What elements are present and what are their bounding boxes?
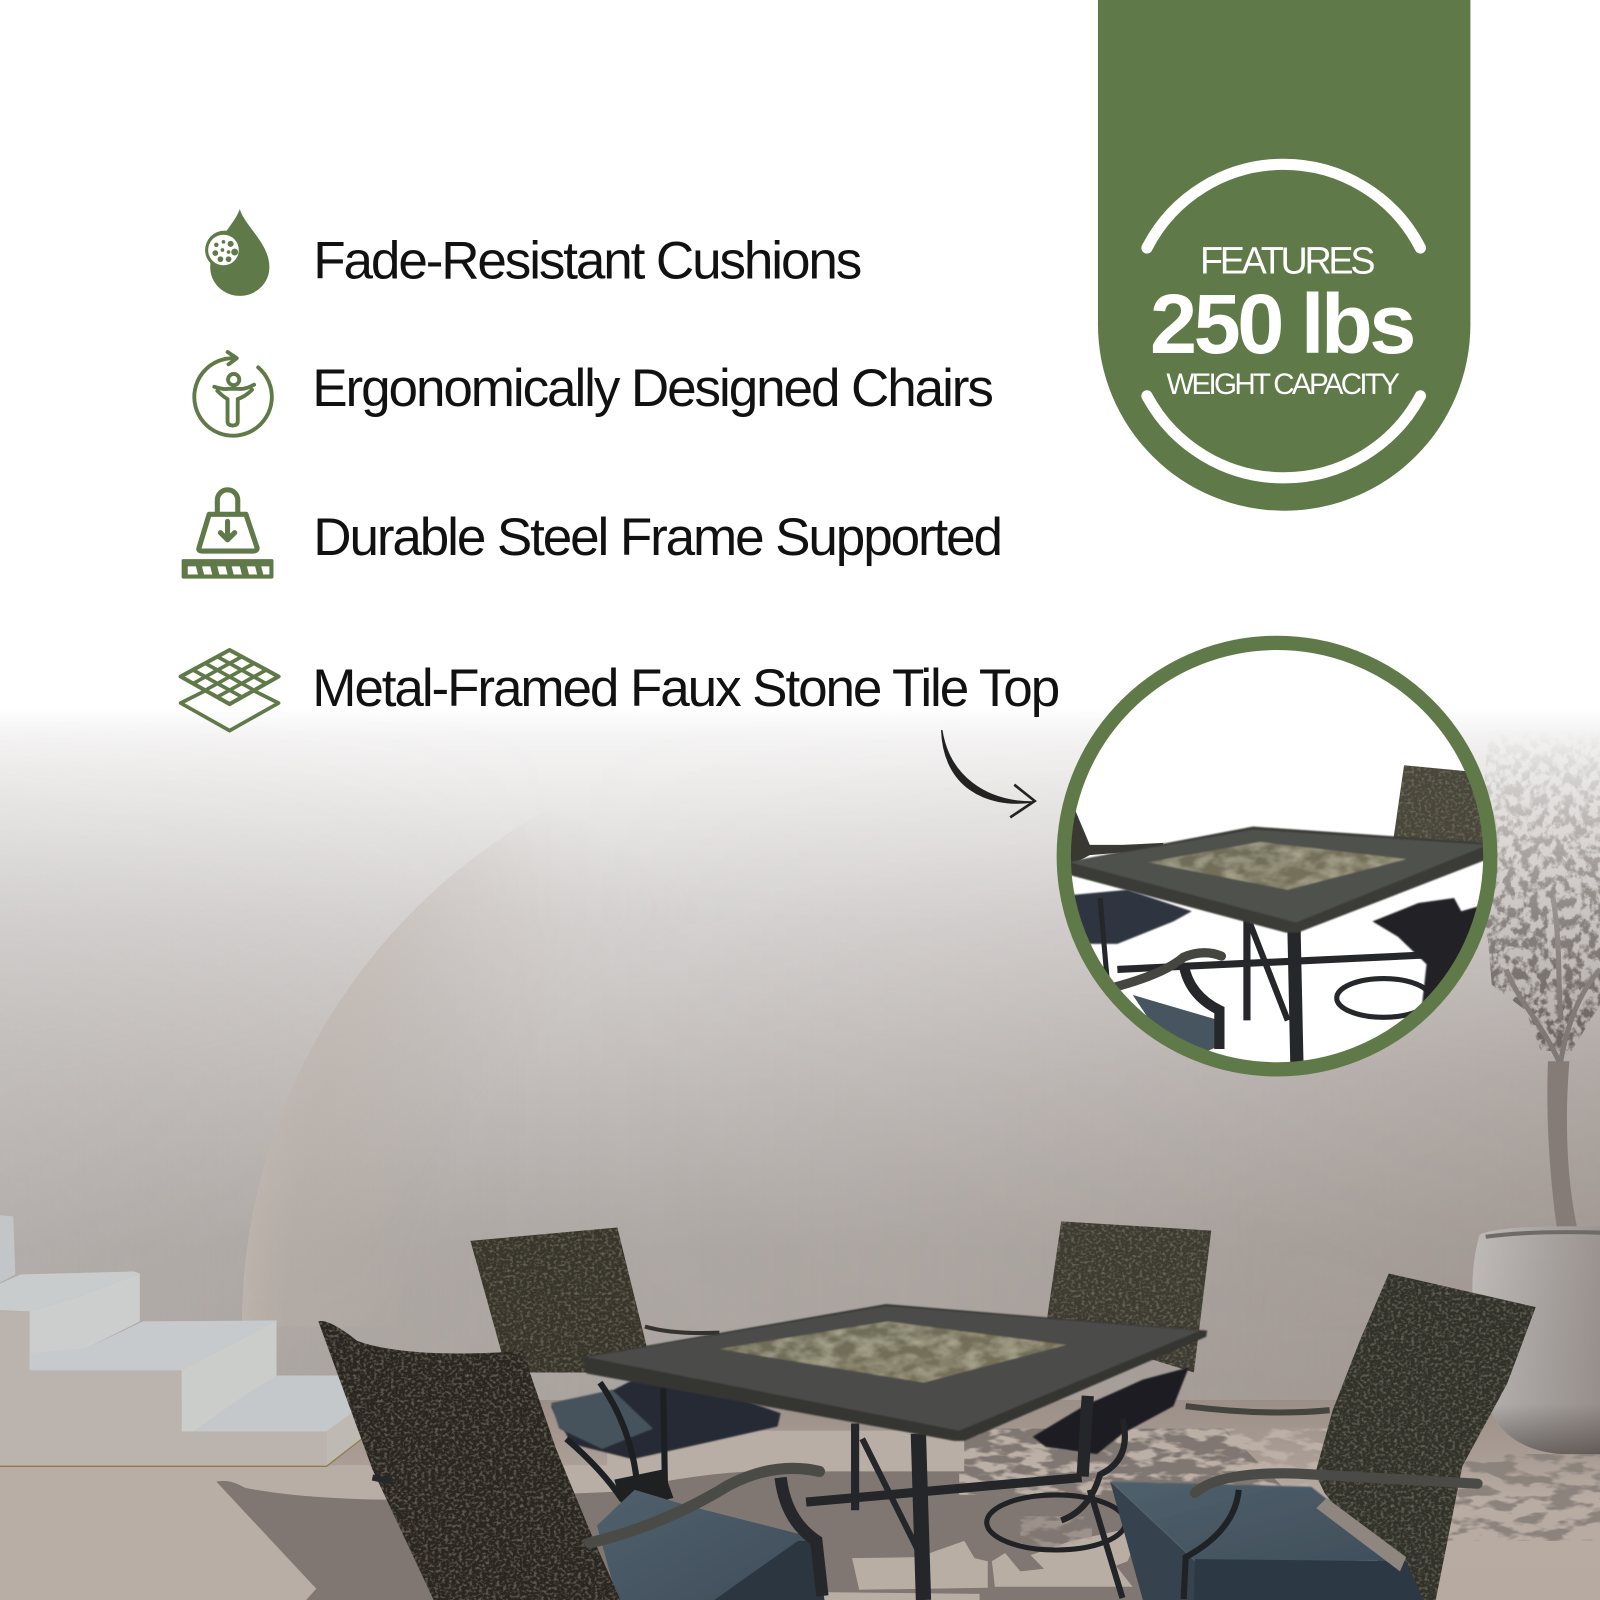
plant pot [1472,1226,1600,1454]
badge text: 250 lbs: 250 lbs [1150,276,1416,371]
tree: foliage [1484,745,1600,1062]
icon: weight on base [182,490,273,579]
background: stairs [0,1215,369,1466]
background: floor [0,1400,1600,1600]
callout: table top [1066,827,1488,933]
feature 1: fade-resistant cushions [205,209,862,296]
text: ergonomically designed chairs: Ergonomically Designed Chairs [312,359,994,418]
callout: rear left chair [1070,811,1164,862]
text: fade-resistant cushions: Fade-Resistant Cushions [313,232,862,291]
table top [582,1304,1207,1441]
chair: back right [1046,1221,1211,1372]
callout: left seat [1061,890,1192,944]
feature 2: ergonomic chairs [194,352,994,436]
feature 4: faux stone tile top [181,650,1060,731]
icon: ergonomic figure in rotating ring [194,352,272,436]
background: curved arch wall [242,844,502,1320]
callout: zoomed table image [1061,765,1490,1066]
floor: cast shadow [216,1429,1388,1600]
badge ring: top arc [1147,164,1420,248]
icon: water drop with fabric swatch [205,209,269,296]
badge text: weight capacity: WEIGHT CAPACITY [1166,368,1400,401]
floor: mottled shadow on the right [1327,1454,1600,1541]
background: warm tint [1018,786,1600,1400]
chair: right under-table mass [987,1367,1189,1598]
table legs [806,1423,1082,1600]
panel: feature list [181,209,1060,731]
callout: table top detail circle [1061,642,1491,1070]
feature 3: durable steel frame [182,490,1003,579]
badge ring: bottom arc [1147,396,1420,478]
callout: front chair seat and arm [1132,994,1214,1050]
callout: green ring [1064,643,1490,1069]
chair: right front [1110,1273,1536,1600]
floor: mottled dappled light right [959,1429,1357,1495]
callout: legs and bars [1100,898,1431,1066]
text: metal-framed faux stone tile top: Metal-Framed Faux Stone Tile Top [312,659,1060,718]
furniture: patio dining set [318,1221,1536,1600]
tree: trunk [1547,1061,1578,1230]
chair: left front [318,1321,824,1600]
tree [1478,730,1600,1230]
badge: 250 lbs weight capacity [1098,0,1470,511]
callout: rear right chair [1394,765,1483,844]
text: durable steel frame supported: Durable Steel Frame Supported [313,508,1003,567]
callout: right chair mass [1372,897,1477,1004]
chair: back left [470,1228,781,1508]
badge text: features: FEATURES [1200,239,1376,281]
arrow: pointing to table detail [942,731,1035,817]
floor: light patches [439,1526,1143,1600]
icon: layered tile grid [181,650,279,731]
